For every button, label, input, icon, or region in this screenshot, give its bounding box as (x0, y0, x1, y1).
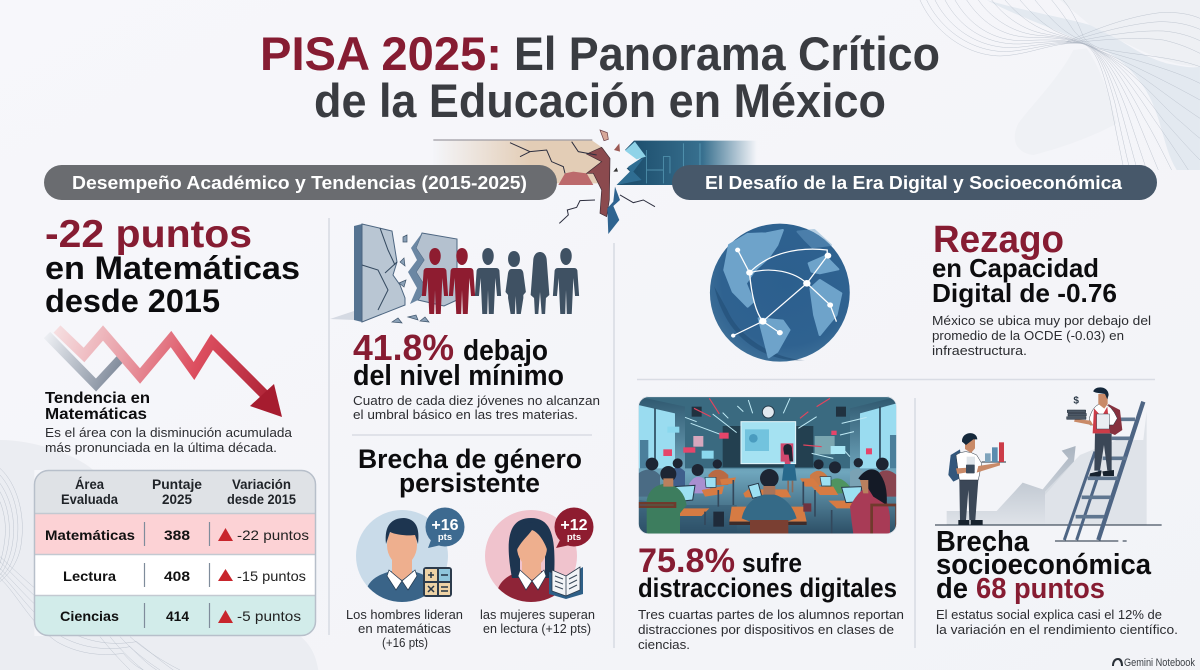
back-row students (638, 458, 897, 497)
caption: mujeres (480, 607, 595, 636)
stat: 41.8%: 41.8% (353, 327, 454, 368)
caption: hombres: (+16 pts) (382, 635, 428, 650)
heading: brecha de género (358, 444, 582, 498)
stat: 41.8%: debajo (463, 335, 548, 367)
table: scores by subject: -5 puntos (237, 608, 301, 624)
icon: girl with book (485, 508, 594, 612)
stat: brecha socioeconómica: socioeconómica (936, 549, 1152, 581)
badge: +12 pts: +12 (560, 517, 588, 534)
stat: brecha socioeconómica (936, 526, 1178, 637)
title (260, 27, 940, 127)
stat: 75.8% distracciones (638, 542, 904, 652)
illustration: students, rising chart and ladder (935, 387, 1162, 541)
icon: networked globe (710, 224, 850, 362)
stat: rezago digital (932, 219, 1151, 358)
table: scores by subject: -22 puntos (237, 527, 309, 543)
table: scores by subject: Matemáticas (45, 527, 135, 543)
rising chart background (947, 446, 1076, 525)
table: scores by subject: 408 (164, 568, 190, 584)
stat: brecha socioeconómica: 68 puntos (976, 573, 1105, 605)
illustration: cracked band between tradition and digital (433, 130, 758, 234)
stat: rezago digital: infraestructura. (932, 343, 1027, 358)
icon: boy with calculator (356, 508, 464, 612)
table: scores by subject: Variación (232, 477, 291, 492)
section header: right: El Desafío de la Era Digital y Socioeconómica (705, 173, 1123, 193)
heading: brecha de género: Brecha de género (358, 444, 582, 474)
table: scores by subject (34, 470, 316, 636)
stat: 41.8%: el umbral básico en las tres materias. (353, 407, 578, 422)
icon: falling zigzag arrow (47, 329, 282, 417)
text: tendencia en matemáticas: Matemáticas (45, 406, 147, 423)
stat: 75.8% distracciones: Tres cuartas partes de los alumnos reportan (638, 607, 904, 622)
table: scores by subject: 2025 (162, 492, 192, 507)
stat: brecha socioeconómica: El estatus social explica casi el 12% de (936, 607, 1162, 622)
foreground students (638, 466, 897, 537)
stat: 41.8%: del nivel mínimo (353, 360, 564, 392)
caption: mujeres: las mujeres superan (480, 607, 595, 622)
section header: left (44, 165, 557, 200)
title: de la Educación en México (314, 74, 886, 127)
background waves top right (920, 0, 1200, 170)
student on ladder: $ (1073, 395, 1079, 406)
student holding bar chart (948, 433, 1006, 525)
stat: -22 puntos: -22 puntos (45, 213, 252, 256)
background waves bottom left (0, 440, 318, 670)
stat: 75.8% distracciones: distracciones digitales (638, 573, 897, 603)
illustration: cracked wall and six students (330, 224, 579, 323)
stat: 75.8% distracciones: sufre (742, 548, 802, 578)
ladder (1064, 402, 1143, 540)
student on ladder (1067, 387, 1122, 476)
section header: left: Desempeño Académico y Tendencias (2015-2025) (72, 173, 527, 193)
table: scores by subject: -15 puntos (237, 568, 306, 584)
text: tendencia en matemáticas: Tendencia en (45, 390, 150, 407)
table: scores by subject: Evaluada (61, 492, 118, 507)
text: tendencia en matemáticas (45, 390, 293, 455)
stat: -22 puntos: desde 2015 (45, 283, 220, 319)
section header: right (672, 165, 1157, 200)
table: scores by subject: Área (75, 477, 104, 492)
stat: rezago digital: México se ubica muy por debajo del (932, 313, 1151, 328)
stat: 75.8% distracciones: distracciones por dispositivos en clases de (638, 622, 894, 637)
stat: rezago digital: Rezago (933, 219, 1064, 261)
title: El Panorama Crítico (514, 27, 940, 80)
stat: rezago digital: en Capacidad (932, 253, 1099, 283)
heading: brecha de género: persistente (399, 468, 540, 498)
caption: hombres (346, 607, 463, 650)
badge: +16 pts (426, 508, 464, 548)
illustration: classroom with digital distractions (638, 397, 897, 537)
table: scores by subject: Lectura (63, 568, 116, 584)
stat: -22 puntos (45, 213, 300, 319)
stat: brecha socioeconómica: de (936, 573, 968, 605)
stat: rezago digital: promedio de la OCDE (-0.03) en (932, 328, 1124, 343)
table: scores by subject: Puntaje (152, 477, 202, 492)
stat: rezago digital: Digital de -0.76 (932, 278, 1117, 308)
text: tendencia en matemáticas: Es el área con la disminución acumulada (45, 425, 293, 440)
caption: hombres: Los hombres lideran (346, 607, 463, 622)
stat: 41.8%: Cuatro de cada diez jóvenes no alcanzan (353, 393, 600, 408)
table: scores by subject: 388 (164, 527, 190, 543)
desks and tablets (670, 477, 867, 534)
title: PISA 2025: (260, 27, 502, 80)
table: scores by subject: Ciencias (60, 608, 119, 624)
stat: brecha socioeconómica: Brecha (936, 526, 1030, 558)
table: scores by subject: 414 (166, 608, 189, 624)
stat: 75.8% distracciones: 75.8% (638, 542, 735, 580)
text: tendencia en matemáticas: más pronunciada en la última década. (45, 440, 277, 455)
stat: brecha socioeconómica: la variación en el rendimiento científico. (936, 622, 1178, 637)
badge: +16 pts: +16 (431, 517, 459, 534)
stat: -22 puntos: en Matemáticas (45, 250, 300, 286)
caption: mujeres: en lectura (+12 pts) (483, 621, 591, 636)
badge: +12 pts: pts (567, 532, 581, 543)
stat: 41.8% (353, 327, 600, 422)
badge: +16 pts: pts (438, 532, 452, 543)
badge: +12 pts (554, 508, 594, 548)
table: scores by subject: desde 2015 (227, 492, 296, 507)
caption: hombres: en matemáticas (358, 621, 452, 636)
stat: 75.8% distracciones: ciencias. (638, 637, 690, 652)
people silhouettes (422, 248, 475, 314)
